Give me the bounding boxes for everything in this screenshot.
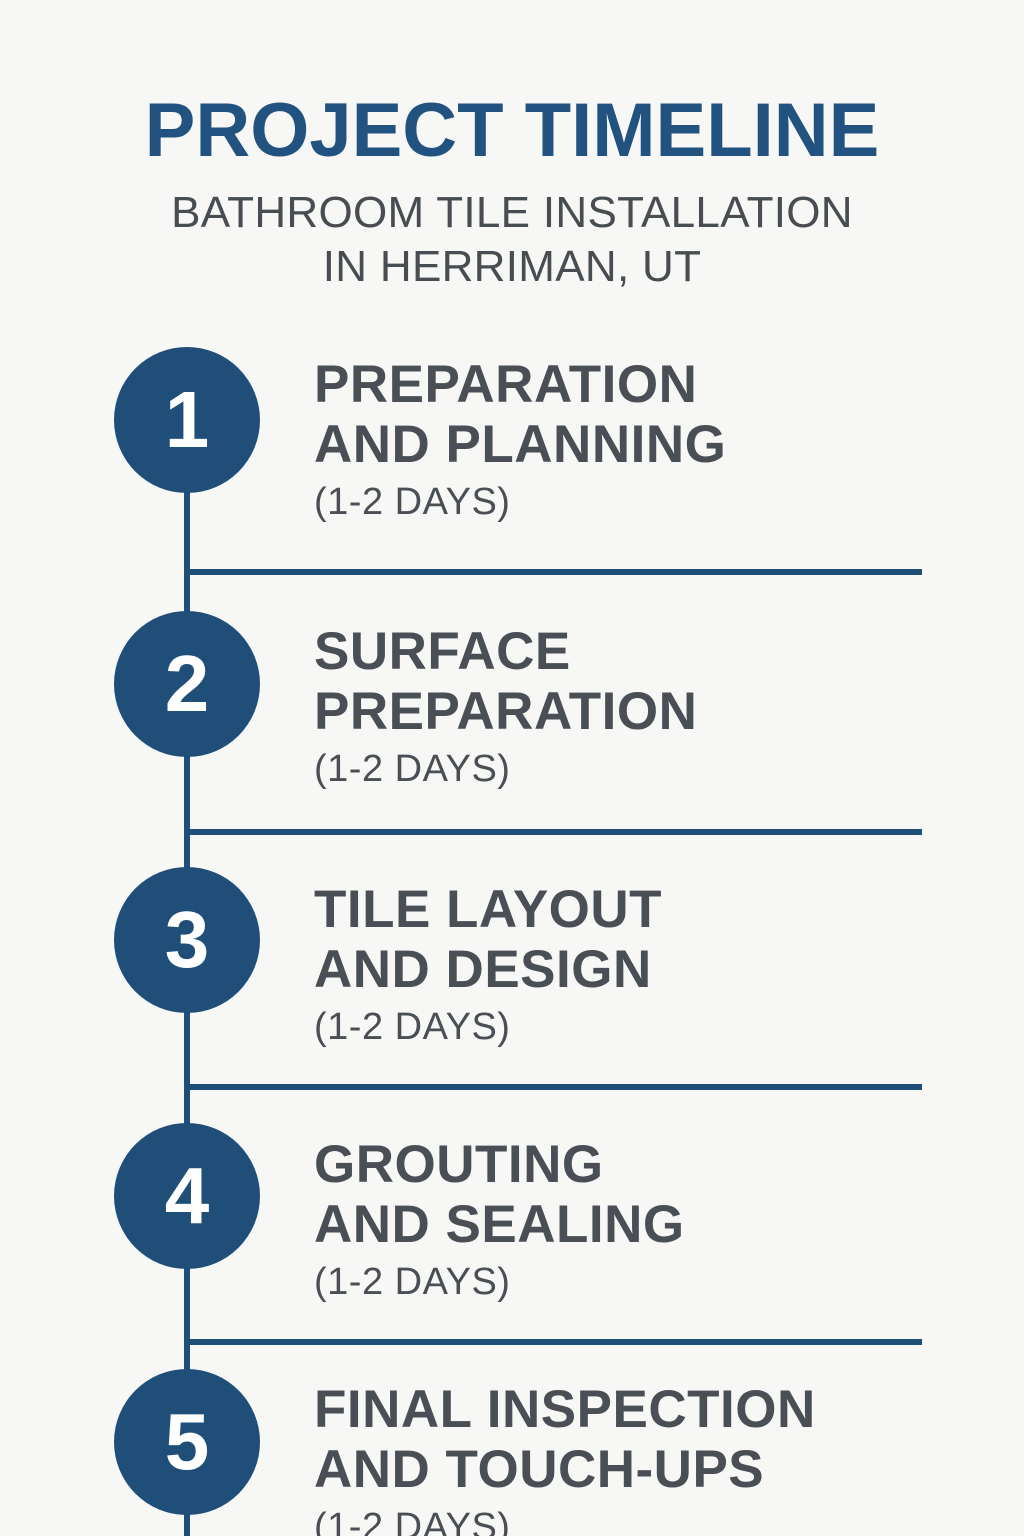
step 4 circle: 4 (165, 1151, 209, 1240)
timeline vertical line (184, 420, 190, 1536)
step 3 text: AND DESIGN (314, 940, 652, 999)
subtitle: BATHROOM TILE INSTALLATION (171, 188, 853, 237)
step 4 circle (114, 1123, 260, 1269)
step 1 text (314, 355, 726, 523)
divider 2 (187, 829, 922, 835)
step 4 text (314, 1135, 685, 1303)
divider 1 (187, 569, 922, 575)
step 2 text: (1-2 DAYS) (314, 748, 510, 790)
subtitle (171, 188, 853, 291)
divider 4 (187, 1339, 922, 1345)
step 1 text: (1-2 DAYS) (314, 481, 510, 523)
subtitle: IN HERRIMAN, UT (323, 242, 701, 291)
title: PROJECT TIMELINE (145, 88, 879, 173)
step 2 text: SURFACE (314, 622, 571, 681)
step 5 circle (114, 1369, 260, 1515)
step 1 circle: 1 (165, 375, 209, 464)
step 1 circle (114, 347, 260, 493)
step 3 text: (1-2 DAYS) (314, 1006, 510, 1048)
step 2 text: PREPARATION (314, 682, 697, 741)
step 2 circle (114, 611, 260, 757)
step 1 text: PREPARATION (314, 355, 697, 414)
step 5 text (314, 1380, 816, 1536)
step 4 text: AND SEALING (314, 1195, 685, 1254)
step 5 text: FINAL INSPECTION (314, 1380, 816, 1439)
step 3 circle (114, 867, 260, 1013)
step 1 text: AND PLANNING (314, 415, 726, 474)
step 5 circle: 5 (165, 1397, 209, 1486)
step 3 text (314, 880, 662, 1048)
step 2 circle: 2 (165, 639, 209, 728)
step 4 text: GROUTING (314, 1135, 604, 1194)
step 2 text (314, 622, 697, 790)
step 3 circle: 3 (165, 895, 209, 984)
step 5 text: AND TOUCH-UPS (314, 1440, 764, 1499)
step 4 text: (1-2 DAYS) (314, 1261, 510, 1303)
divider 3 (187, 1084, 922, 1090)
step 3 text: TILE LAYOUT (314, 880, 662, 939)
